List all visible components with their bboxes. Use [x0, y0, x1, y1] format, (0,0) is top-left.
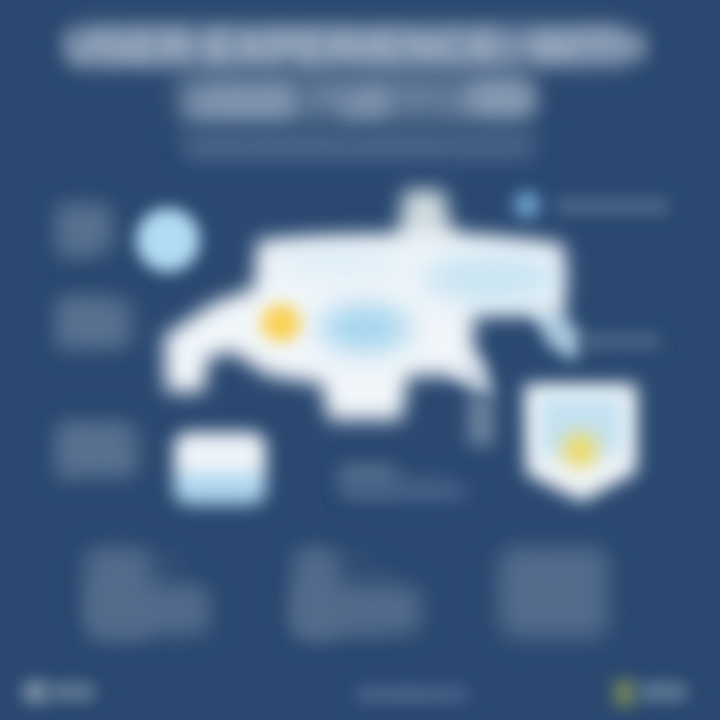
bottom column 3	[490, 538, 618, 648]
small connector bar	[468, 396, 494, 446]
bottom column 3: Support Helpful guides and live chat give people answers	[500, 550, 605, 621]
bottom column 1: Access Simple login and clear menus help users reach all tools	[85, 550, 203, 621]
right legend: Usage metrics	[580, 333, 663, 348]
footer logo right: Cloud	[638, 682, 677, 699]
top right legend: Cloud services list	[555, 198, 668, 214]
left text block 2	[46, 287, 142, 358]
left text block 3	[46, 412, 148, 488]
footer logo right	[605, 672, 692, 714]
shield panel	[510, 369, 652, 514]
center text block: Data insights and user flow reports	[338, 465, 446, 498]
title: USER EXPERIENCE: WITH	[65, 21, 648, 72]
center text block	[331, 456, 466, 506]
subtitle: Cloud platform usability	[182, 135, 443, 157]
bottom column 1	[74, 540, 218, 650]
left text block 1	[46, 194, 122, 267]
right legend	[572, 328, 663, 354]
bottom column 2: Speed Fast response times keep work moving and reduce delays	[295, 550, 397, 638]
title	[52, 12, 656, 133]
icon: data card	[174, 432, 266, 504]
subtitle	[178, 132, 539, 166]
icon: light blue circle	[136, 208, 200, 272]
title: LOUD PLATFORM	[185, 77, 529, 123]
footer logo left	[14, 672, 100, 712]
footer logo left: Cloud	[48, 682, 87, 699]
bottom column 2	[282, 540, 428, 650]
top right legend	[505, 183, 672, 227]
footer center text: cloud-platform	[356, 686, 438, 701]
footer center text	[354, 681, 468, 708]
